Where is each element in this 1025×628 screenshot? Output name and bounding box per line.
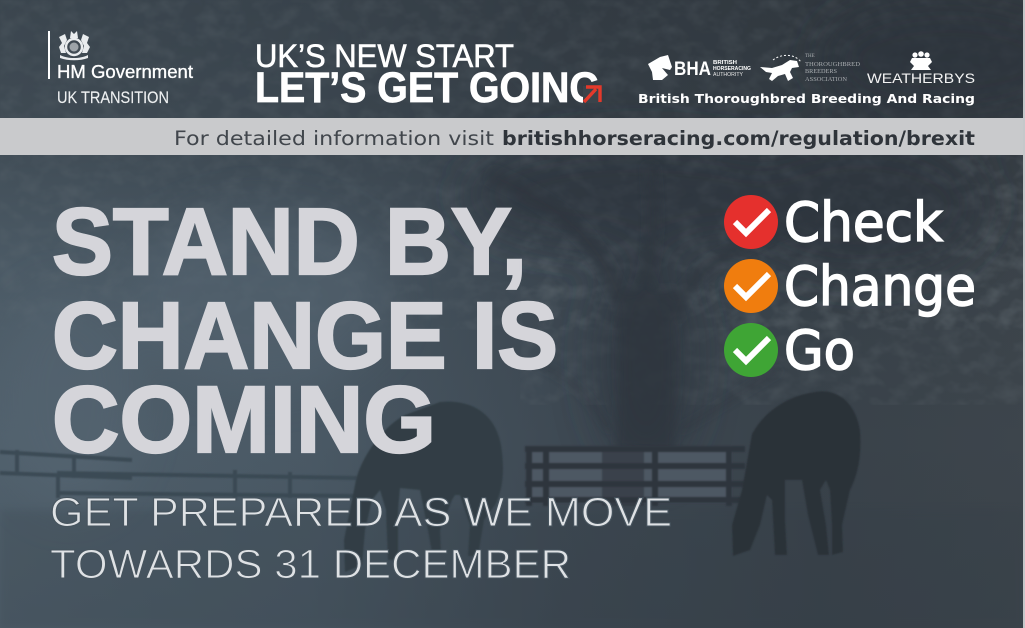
main heading: CHANGE IS: [52, 283, 558, 389]
logo: Weatherbys: WEATHERBYS: [867, 71, 975, 86]
partner logos: [638, 51, 975, 106]
subheading: [50, 489, 672, 587]
fence: left paddock: [0, 450, 357, 500]
logo: Thoroughbred Breeders Association: THOROUGHBRED: [805, 61, 860, 68]
logo: Weatherbys: [867, 51, 975, 86]
logo: BHA: BRITISH: [713, 60, 737, 66]
right edge of frame: [1023, 0, 1025, 628]
logo: BHA: AUTHORITY: [713, 72, 744, 78]
icon: horse head: [648, 55, 672, 80]
text: British Thoroughbred Breeding And Racing: British Thoroughbred Breeding And Racing: [638, 91, 975, 106]
logo: BHA: HORSERACING: [713, 66, 751, 72]
logo: BHA: BHA: [674, 59, 711, 80]
text: website address: britishhorseracing.com/regulation/brexit: [502, 127, 975, 150]
campaign logo: UK's New Start, Let's Get Going: [255, 38, 601, 112]
icon: royal coat of arms: [59, 31, 90, 60]
icon: crown: [910, 51, 932, 70]
text: HM Government: HM Government: [57, 61, 193, 82]
item: go: Go: [784, 319, 855, 382]
icon: mare and foal: [760, 60, 799, 81]
logo: HM Government UK Transition: [48, 31, 193, 107]
horse: right, grazing: [732, 391, 861, 556]
text: UK Transition: UK TRANSITION: [57, 89, 169, 107]
logo: Thoroughbred Breeders Association: [760, 54, 860, 83]
logo: Thoroughbred Breeders Association: BREEDERS: [805, 68, 837, 75]
icon: red arrow: [583, 86, 601, 103]
text: Let's get going: LET’S GET GOING: [255, 64, 600, 112]
logo: BHA: [648, 55, 751, 80]
item: check: Check: [784, 191, 944, 254]
subheading: GET PREPARED AS WE MOVE: [50, 489, 672, 535]
information bar: [0, 118, 1023, 155]
logo: Thoroughbred Breeders Association: ASSOCIATION: [805, 76, 847, 83]
horse: left, grazing: [344, 402, 503, 572]
subheading: TOWARDS 31 DECEMBER: [50, 541, 571, 587]
logo: Thoroughbred Breeders Association: THE: [805, 54, 815, 59]
main heading: COMING: [52, 367, 436, 473]
main heading: STAND BY,: [52, 189, 527, 295]
main heading: [52, 189, 558, 473]
item: change: Change: [784, 255, 976, 318]
logo rule: [48, 31, 50, 79]
checklist: [724, 191, 976, 382]
fence: centre paddock: [525, 446, 745, 506]
text: visit message: For detailed information visit: [174, 127, 494, 150]
item: go: [724, 319, 855, 382]
text: UK's new start: UK’S NEW START: [255, 38, 514, 74]
